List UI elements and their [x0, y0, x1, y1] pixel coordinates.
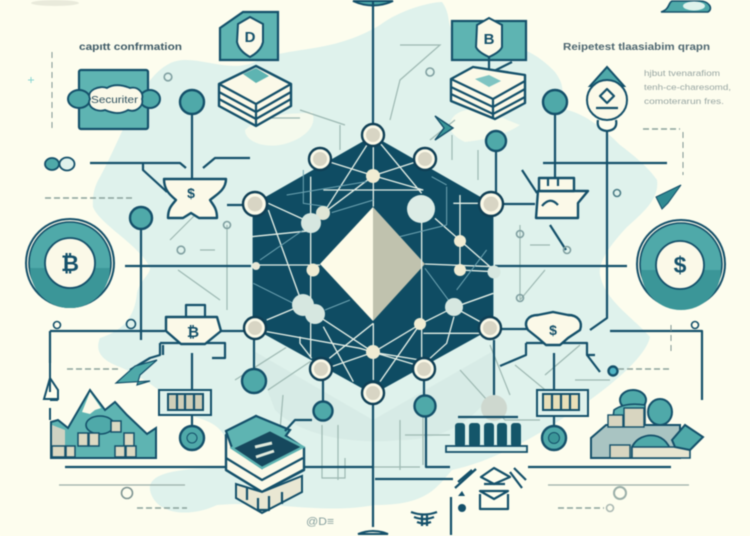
network links	[252, 135, 494, 382]
footer rules and markers	[28, 52, 689, 512]
right stacked blocks pile	[591, 390, 703, 458]
right ledger box	[536, 178, 588, 218]
right pin icon	[587, 67, 627, 131]
left shield banner: D	[245, 29, 256, 46]
right dollar coin: $	[674, 252, 687, 278]
paper plane bottom left	[116, 360, 157, 385]
left shield banner	[220, 12, 278, 60]
right shield banner: B	[484, 31, 495, 48]
right body text: hjbut tvenarafiom	[644, 68, 720, 78]
small ring markers	[54, 68, 698, 328]
right bitcoin anvil	[526, 312, 581, 345]
right bitcoin anvil: $	[549, 322, 557, 338]
right teal nodes	[414, 90, 618, 416]
right bars stand	[446, 395, 527, 452]
left teal nodes	[130, 90, 332, 420]
bottom circle	[358, 531, 388, 534]
central hexagon network	[243, 124, 503, 404]
securities badge: Securiter	[91, 94, 139, 106]
left heading: capıtt confrmation	[79, 41, 182, 53]
right heading: Reipetest tlaasiabim qrapn	[563, 41, 710, 53]
left bitcoin coin	[26, 219, 114, 308]
right battery	[537, 390, 588, 416]
node centres	[248, 128, 498, 400]
dollar anvil: $	[187, 185, 195, 201]
mountains and blocks	[44, 363, 156, 458]
paper plane top right	[656, 185, 681, 209]
left target circle	[180, 426, 204, 450]
bottom center house icon	[455, 468, 526, 512]
left stacked blocks	[219, 66, 291, 126]
bottom wifi icon	[411, 512, 437, 526]
left bitcoin anvil: ₿	[187, 324, 199, 341]
right body text: comoterarun fres.	[644, 96, 724, 106]
right body text: tenh-ce-charesomd,	[644, 82, 731, 92]
blue accent links	[253, 170, 487, 310]
left cloud	[45, 158, 74, 170]
faint background wiring	[170, 45, 610, 480]
right dollar coin	[637, 220, 725, 310]
outer network nodes	[243, 124, 503, 404]
right shield banner	[452, 18, 526, 72]
left battery	[159, 390, 211, 415]
background cloud blob	[93, 2, 657, 513]
bottom left glyph mark: @D≡	[306, 516, 334, 528]
top circle	[353, 1, 393, 6]
central diamond	[320, 207, 425, 321]
dollar anvil	[164, 179, 226, 218]
right stacked blocks	[451, 67, 525, 119]
securities badge	[68, 70, 160, 129]
left bitcoin anvil	[166, 305, 221, 344]
inner network nodes	[252, 169, 500, 359]
top right cloud	[661, 1, 710, 12]
left bitcoin coin: ₿	[61, 251, 79, 276]
left building	[226, 416, 312, 513]
right target circle	[542, 426, 566, 450]
right arrow icon	[435, 116, 453, 140]
top-left smudge	[31, 0, 79, 6]
